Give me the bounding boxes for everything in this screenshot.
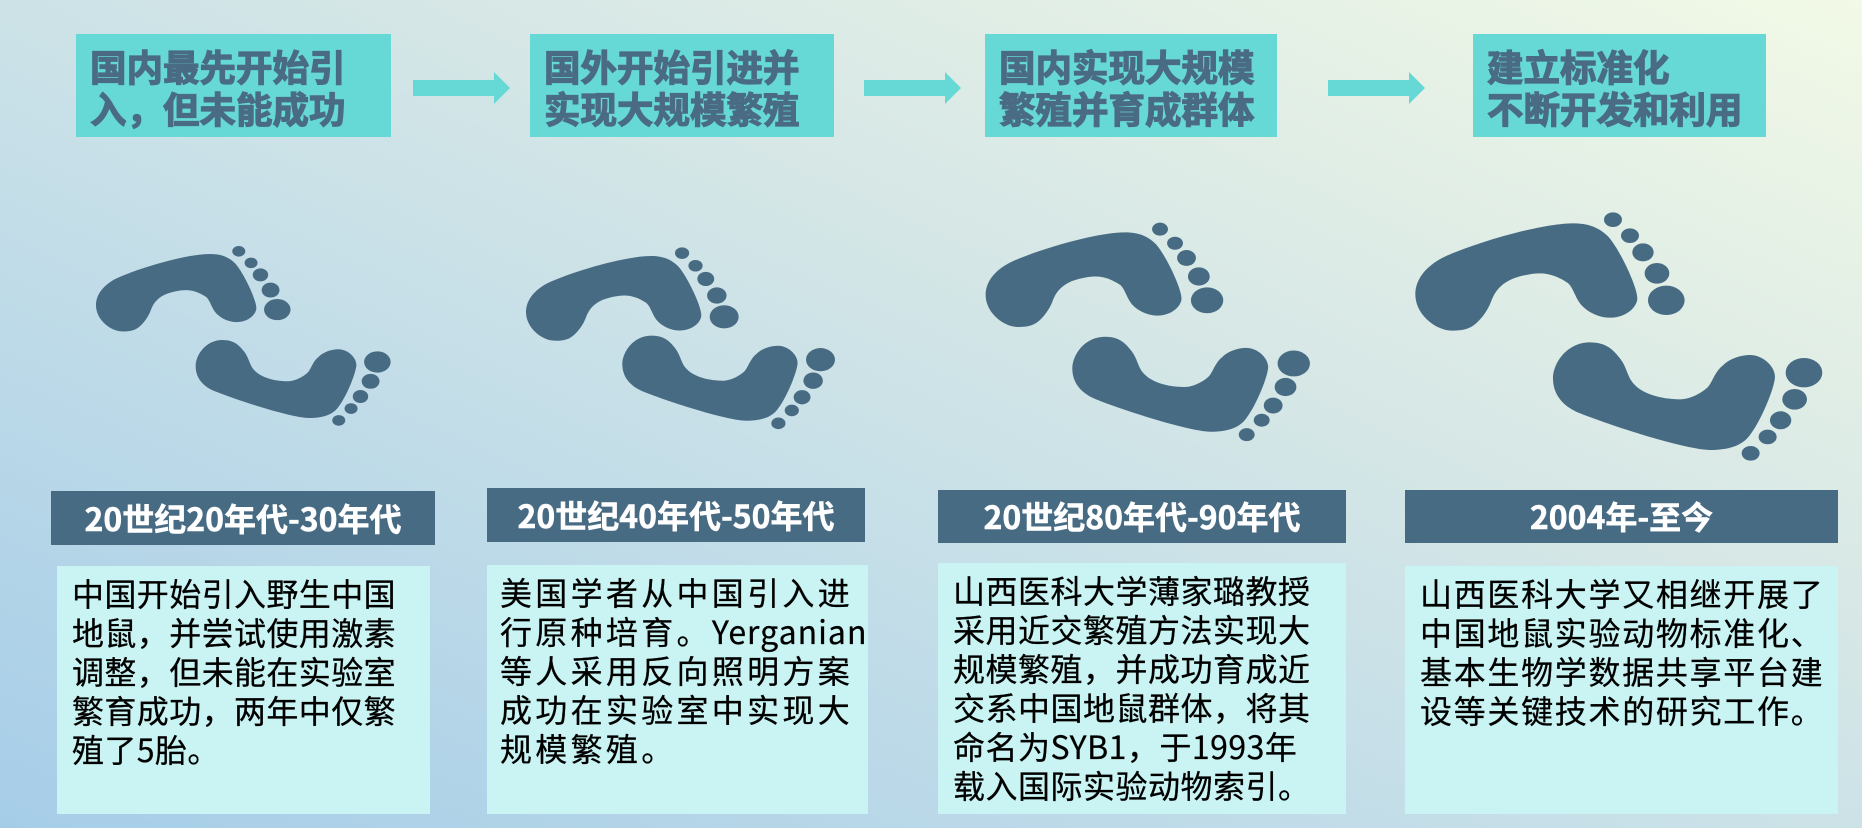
process heading 1: 国内最先开始引 <box>90 39 346 92</box>
description panel 3: 山西医科大学薄家璐教授 <box>953 567 1311 613</box>
description panel 1: 繁育成功，两年中仅繁 <box>72 687 396 733</box>
icon: footprints 2 <box>526 247 835 429</box>
description panel 2: 等人采用反向照明方案 <box>500 647 853 693</box>
description panel 3: 命名为SYB1，于1993年 <box>953 723 1297 769</box>
process heading 3: 繁殖并育成群体 <box>999 81 1254 134</box>
description panel 3: 交系中国地鼠群体，将其 <box>953 684 1311 730</box>
description panel 2: 成功在实验室中实现大 <box>500 686 853 732</box>
process heading 4: 建立标准化 <box>1487 39 1670 92</box>
process heading 2 <box>530 34 834 137</box>
period label 2: 20世纪40年代-50年代 <box>517 492 835 538</box>
process heading 1: 入，但未能成功 <box>90 81 346 134</box>
description panel 1: 中国开始引入野生中国 <box>72 570 396 616</box>
description panel 3: 采用近交繁殖方法实现大 <box>953 606 1311 652</box>
description panel 1: 地鼠，并尝试使用激素 <box>72 609 396 655</box>
description panel 3: 规模繁殖，并成功育成近 <box>953 645 1311 691</box>
process heading 2: 国外开始引进并 <box>544 39 800 92</box>
description panel 2: 规模繁殖。 <box>500 725 677 771</box>
icon: footprints 4 <box>1415 212 1822 461</box>
description panel 3: 载入国际实验动物索引。 <box>953 762 1311 808</box>
description panel 4: 中国地鼠实验动物标准化、 <box>1420 609 1824 655</box>
period label 3: 20世纪80年代-90年代 <box>983 493 1301 539</box>
process heading 3 <box>985 34 1277 137</box>
process heading 2: 实现大规模繁殖 <box>544 81 800 134</box>
description panel 2: 美国学者从中国引入进 <box>500 569 853 615</box>
description panel 4 <box>1405 566 1838 814</box>
icon: footprints 1 <box>96 246 391 426</box>
arrow 3 <box>1328 72 1425 104</box>
description panel 2 <box>487 565 868 814</box>
period label 4 <box>1405 490 1838 543</box>
period label 3 <box>938 490 1346 543</box>
process heading 1 <box>76 34 391 137</box>
description panel 1 <box>57 566 430 814</box>
description panel 4: 基本生物学数据共享平台建 <box>1420 648 1824 694</box>
period label 1: 20世纪20年代-30年代 <box>84 495 402 541</box>
description panel 3 <box>938 563 1346 814</box>
arrow 2 <box>864 72 961 104</box>
description panel 2: 行原种培育。Yerganian <box>500 608 867 654</box>
description panel 4: 设等关键技术的研究工作。 <box>1420 687 1824 733</box>
period label 4: 2004年-至今 <box>1530 493 1713 539</box>
description panel 4: 山西医科大学又相继开展了 <box>1420 570 1824 616</box>
process heading 3: 国内实现大规模 <box>999 39 1254 92</box>
description panel 1: 调整，但未能在实验室 <box>72 648 396 694</box>
icon: footprints 3 <box>986 223 1310 441</box>
description panel 1: 殖了5胎。 <box>72 726 220 772</box>
process heading 4: 不断开发和利用 <box>1487 81 1742 134</box>
process heading 4 <box>1473 34 1766 137</box>
arrow 1 <box>413 72 510 104</box>
